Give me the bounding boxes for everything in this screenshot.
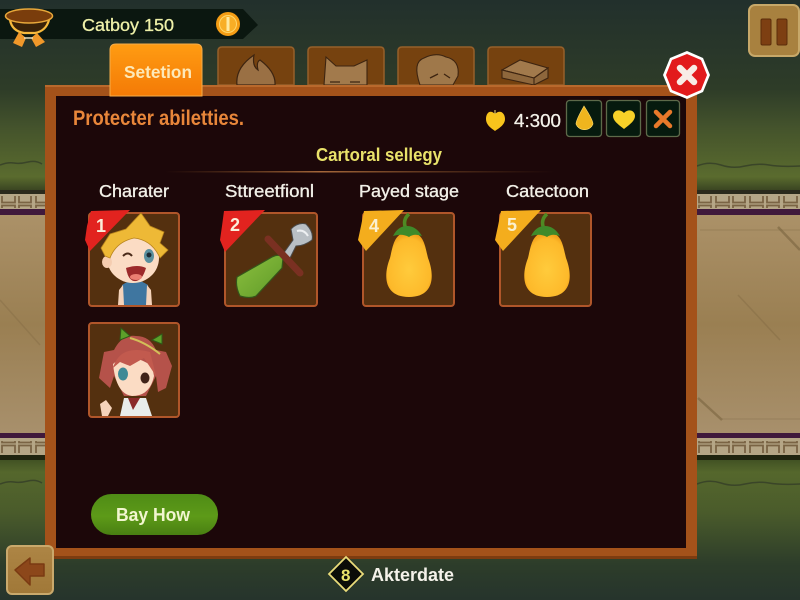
icon: back arrow button [7,546,53,594]
icon: gold bell emblem [6,9,52,47]
resource counter [486,110,561,131]
subheading: Cartoral sellegy [316,145,442,165]
tab: inactive cat head [308,47,384,85]
badge: 2 [220,210,265,252]
icon: close button [663,51,710,99]
card: yellow eggplant 4 [363,213,454,306]
icon: cross button [646,100,680,136]
footer label: 8 Akterdate: 8 [341,566,350,585]
card: red-haired character [89,323,179,417]
resource counter: 4:300 [514,111,561,131]
tab: inactive flame [218,47,294,85]
icon: heart button [606,100,640,136]
tab: inactive box [488,47,564,85]
card: yellow eggplant 5 [500,213,591,306]
panel: main frame [45,85,697,559]
icon: gold coin [216,12,240,36]
badge: 5 [495,210,541,251]
card: green flashlight item [225,213,317,306]
footer label: 8 Akterdate [329,557,454,591]
heading: panel title: Protecter abiletties. [73,107,244,130]
footer label: 8 Akterdate: Akterdate [371,564,454,585]
icon: pause button [749,5,799,56]
column label: Charater: Charater [99,181,169,201]
card: blond character [89,213,179,306]
badge: 1 [85,210,130,251]
button: Bay How [91,494,218,535]
column label: Catectoon: Catectoon [506,181,589,201]
badge: 4: 4 [369,216,379,236]
tab: active Setetion: Setetion [124,62,192,82]
badge: 1: 1 [96,216,106,236]
button: Bay How: Bay How [116,504,191,525]
icon: drop button [566,100,602,136]
badge: 4 [358,210,404,251]
player name: Catboy 150 [82,15,174,35]
badge: 2: 2 [230,215,240,235]
tab: active Setetion [110,44,202,96]
tab: inactive girl head [398,47,474,85]
badge: 5: 5 [507,215,517,235]
column label: Payed stage: Payed stage [359,181,459,201]
column label: Streetfionl: Sttreetfionl [225,181,314,201]
top status bar [0,9,258,39]
